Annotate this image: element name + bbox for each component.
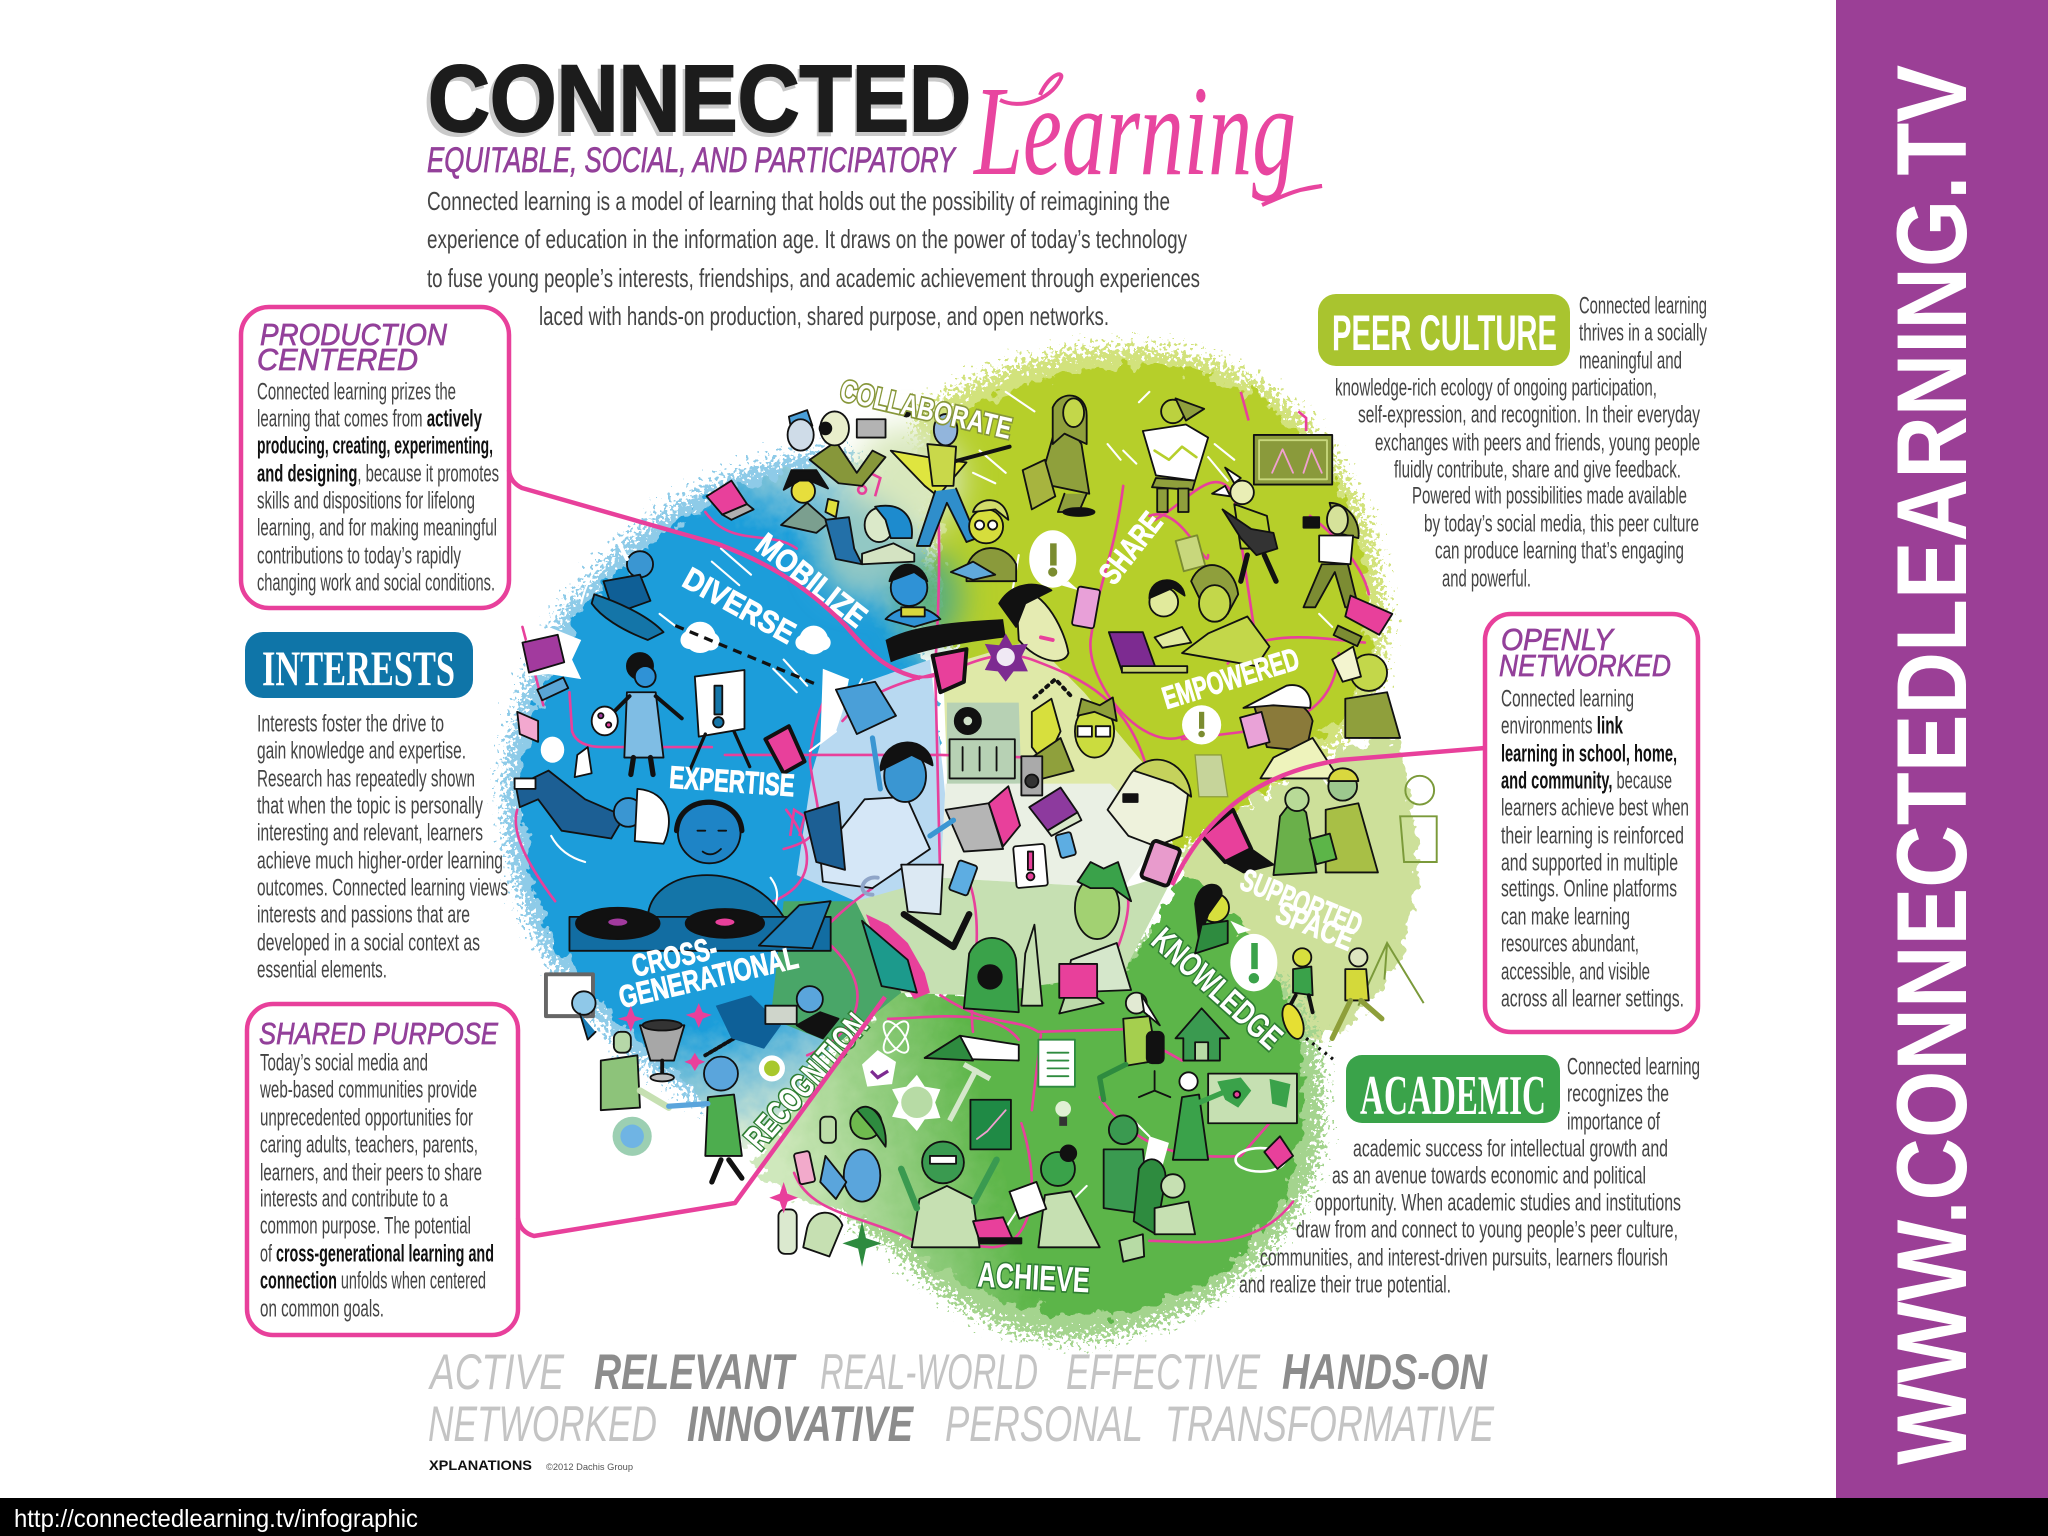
text block: production centered: skills and dispositions for lifelong	[257, 488, 475, 514]
figure: woman at laptop	[1182, 565, 1270, 666]
intro paragraph: experience of education in the information age. It draws on the power of today’s technology	[427, 224, 1187, 254]
text block: peer culture: and powerful.	[1442, 566, 1531, 592]
intro paragraph	[427, 186, 1200, 331]
blob: supported space pale green	[1175, 731, 1418, 1040]
keyword list: PERSONAL	[945, 1396, 1143, 1452]
title: Connected Learning: Learning	[973, 60, 1296, 202]
connector: openly networked to diagram	[1172, 748, 1485, 885]
heading: production centered: CENTERED	[257, 342, 418, 377]
credits: ©2012 Dachis Group	[546, 1462, 633, 1473]
text block: openly networked: across all learner settings.	[1501, 986, 1684, 1012]
figure: woman with shopping bag	[1023, 396, 1095, 516]
icon: atom	[879, 1018, 913, 1057]
figure: guy with glasses and green hair	[1075, 697, 1117, 758]
icon: blue open laptop with burst	[820, 669, 896, 744]
text block: openly networked: accessible, and visible	[1501, 958, 1650, 986]
badge: peer culture	[1318, 294, 1570, 366]
figure: woman with clipboard	[1009, 1145, 1100, 1247]
icon: blue scroll and tools	[825, 499, 862, 564]
text block: shared purpose: of cross-generational learning and	[260, 1240, 494, 1268]
text block: peer culture: fluidly contribute, share and give feedback.	[1394, 456, 1681, 484]
icon: green chalkboard	[970, 1100, 1011, 1149]
panel: shared purpose	[247, 997, 885, 1335]
text block: production centered: learning that comes from actively	[257, 406, 482, 432]
text block: openly networked: learning in school, home,	[1501, 740, 1677, 768]
icon: trophy	[640, 1020, 684, 1081]
text block: interests: that when the topic is personally	[257, 792, 483, 820]
icon: sun yellow green	[759, 1055, 785, 1081]
figure: man with cap and phone	[1240, 685, 1339, 778]
text block: openly networked: learners achieve best when	[1501, 794, 1689, 822]
blob: peer culture yellow-green	[914, 348, 1384, 849]
credits	[429, 1457, 633, 1473]
text block: openly networked: can make learning	[1501, 904, 1630, 930]
title: Connected Learning	[424, 46, 1322, 205]
title: Connected Learning: CONNECTED	[424, 50, 970, 156]
heading: openly networked: NETWORKED	[1499, 648, 1671, 683]
icon: white sun	[892, 1075, 940, 1131]
icon: exclamation bubble small	[1182, 705, 1221, 744]
figure: audience with laptop on table	[1104, 1115, 1195, 1234]
icon: purple laptop lower	[1029, 788, 1081, 836]
icon: pink laptop	[707, 481, 754, 520]
text block: production centered	[257, 378, 499, 596]
keyword list: HANDS-ON	[1282, 1344, 1488, 1400]
icon: pink tablet small	[1140, 840, 1181, 887]
badge: academic: ACADEMIC	[1360, 1065, 1546, 1127]
icon: blue phone	[1055, 832, 1076, 858]
icon: paper bag	[1195, 755, 1228, 797]
text block: production centered: changing work and social conditions.	[257, 570, 495, 596]
figure: girl with dark braids	[1195, 885, 1229, 953]
text block: interests: Interests foster the drive to	[257, 710, 444, 738]
subtitle: EQUITABLE, SOCIAL, AND PARTICIPATORY	[427, 141, 957, 180]
icon: teal monitor with burst	[862, 914, 930, 999]
label: SUPPORTED SPACE: SUPPORTED	[1236, 862, 1367, 943]
figure: man eating pizza	[1332, 647, 1400, 738]
figure: scientist with glasses	[901, 1142, 997, 1247]
text block: shared purpose: on common goals.	[260, 1296, 384, 1322]
figure: blue woman	[669, 1038, 742, 1182]
icon: exclamation bubble	[1029, 530, 1079, 590]
text block: shared purpose: web-based communities provide	[259, 1076, 477, 1104]
text block: production centered: learning, and for making meaningful	[257, 514, 497, 542]
figure: glasses person	[951, 500, 1016, 581]
text block: shared purpose	[259, 1050, 494, 1322]
panel: interests	[245, 632, 508, 984]
icon: small table with laptop	[1236, 1136, 1293, 1172]
figure: woman with turban and girl	[1273, 768, 1378, 875]
figure: dreadlock kid	[781, 470, 829, 533]
icon: pink desktop monitor	[1059, 964, 1104, 1014]
figure: green-haired headphone kid	[964, 925, 1042, 1012]
heading: production centered	[257, 317, 448, 377]
text block: openly networked: and supported in multiple	[1501, 850, 1678, 876]
black brush stroke	[886, 619, 1006, 662]
figure: large bald head	[1108, 760, 1191, 846]
text block: openly networked: their learning is reinforced	[1501, 822, 1684, 850]
footer: black source bar: http://connectedlearning.tv/infographic	[14, 1505, 418, 1533]
text block: peer culture	[1335, 292, 1707, 592]
figure: running old man	[1332, 948, 1382, 1038]
badge: academic	[1346, 1055, 1560, 1127]
figure: blue hair person	[862, 506, 914, 564]
text block: production centered: contributions to today’s rapidly	[257, 542, 461, 570]
icon: hammer	[950, 1064, 990, 1121]
icon: pale laptop corner	[1119, 1234, 1144, 1262]
icon: pink laptop with black base	[1202, 810, 1273, 872]
figure: center face with black hair	[999, 585, 1068, 661]
icon: exclamation tablet	[1013, 844, 1048, 888]
title: Connected Learning: CONNECTED	[428, 46, 971, 152]
icon: notebook	[1176, 535, 1205, 571]
panel: production centered	[241, 307, 920, 678]
text block: shared purpose: caring adults, teachers, parents,	[260, 1132, 478, 1158]
text block: academic: opportunity. When academic studies and institutions	[1315, 1190, 1681, 1216]
label: CROSS-GENERATIONAL: GENERATIONAL	[615, 940, 801, 1015]
icon: pink star	[769, 1182, 798, 1213]
figure: boy crossing arms	[886, 565, 940, 627]
icon: green star	[842, 1221, 882, 1267]
text block: shared purpose: connection unfolds when centered	[260, 1268, 486, 1294]
figure: mohawk guy	[1064, 862, 1131, 993]
text block: interests: essential elements.	[257, 956, 387, 984]
text block: interests: Research has repeatedly shown	[257, 766, 475, 792]
icon: exclamation bubble green	[1230, 921, 1277, 991]
keyword list: INNOVATIVE	[687, 1396, 914, 1452]
text block: production centered: producing, creating, experimenting,	[257, 432, 493, 460]
text block: openly networked: Connected learning	[1501, 686, 1634, 712]
text block: academic: importance of	[1567, 1108, 1660, 1136]
heading: production centered: PRODUCTION	[260, 317, 448, 352]
keyword list: NETWORKED	[428, 1396, 657, 1452]
text block: interests: outcomes. Connected learning views	[257, 874, 508, 902]
figure: black-haired boy	[1149, 580, 1191, 648]
text block: interests: achieve much higher-order learning	[257, 848, 503, 874]
dashed line across blue	[675, 626, 816, 684]
icon: pink sparkles	[618, 1003, 712, 1071]
text block: openly networked: environments link	[1501, 712, 1623, 740]
icon: purple monitor with burst	[522, 627, 581, 700]
intro paragraph: laced with hands-on production, shared purpose, and open networks.	[539, 301, 1109, 331]
figure: man with cap and headphones	[788, 410, 814, 451]
label: EXPERTISE: EXPERTISE	[668, 760, 796, 803]
center overlap: pale blue, yellow and green tints	[771, 640, 1175, 1045]
text block: openly networked: settings. Online platforms	[1501, 876, 1677, 902]
icon: world map on screen	[1208, 1074, 1297, 1123]
figure: floating kid	[515, 747, 669, 844]
label: ACHIEVE: ACHIEVE	[977, 1256, 1091, 1300]
icon: pink tablet	[933, 649, 967, 692]
label: SUPPORTED SPACE: SPACE	[1271, 895, 1359, 958]
badge: interests	[245, 632, 473, 698]
icon: sun blue	[613, 1117, 652, 1156]
text block: academic	[1239, 1054, 1700, 1298]
figure: long-hair guy in white shirt	[1303, 503, 1359, 607]
figure: rabbit-ear guitarist	[1212, 468, 1277, 581]
figure: thumbs-up person	[820, 1107, 886, 1147]
text block: peer culture: Connected learning	[1579, 292, 1707, 320]
dotted trail	[1306, 1038, 1335, 1061]
heading: openly networked: OPENLY	[1501, 622, 1615, 657]
blending between blue and yellow fields	[818, 426, 963, 645]
keyword list: RELEVANT	[594, 1344, 797, 1400]
icon: pink laptop lower	[973, 1217, 1021, 1243]
decorative white motion strokes and sparkles	[551, 392, 1332, 1228]
figure: guitarist	[891, 414, 1010, 546]
blob: academic green	[751, 872, 1322, 1339]
text block: shared purpose: learners, and their peers to share	[260, 1160, 482, 1186]
icon: school house	[1175, 1008, 1229, 1061]
sidebar: purple band with URL	[1836, 0, 2048, 1498]
icon: purple laptop	[1109, 632, 1187, 673]
text block: interests: gain knowledge and expertise.	[257, 738, 466, 764]
music notes	[677, 392, 1306, 938]
pink network lines	[516, 455, 1369, 1247]
credits: XPLANATIONS	[429, 1457, 532, 1473]
intro paragraph: to fuse young people’s interests, friendships, and academic achievement through experiences	[427, 263, 1200, 293]
figure: girl with camcorder	[716, 986, 839, 1049]
text block: openly networked: resources abundant,	[1501, 930, 1639, 958]
text block: peer culture: can produce learning that’s engaging	[1435, 538, 1684, 564]
text block: interests: interesting and relevant, learners	[257, 820, 483, 846]
badge: peer culture: PEER CULTURE	[1332, 305, 1557, 361]
heading: openly networked	[1499, 622, 1671, 683]
footer: black source bar	[0, 1498, 2048, 1536]
figure: DJ	[648, 801, 784, 917]
text block: shared purpose: interests and contribute to a	[260, 1186, 448, 1212]
figure: man with handshake	[601, 1032, 669, 1110]
figure: girl with pale hair and tablet	[862, 860, 978, 947]
text block: openly networked	[1501, 686, 1689, 1012]
heading: shared purpose: SHARED PURPOSE	[259, 1016, 498, 1051]
icon: board with triangles	[1254, 435, 1332, 485]
figure: skateboarder	[592, 533, 663, 640]
text block: interests: developed in a social context as	[257, 930, 480, 956]
label: COLLABORATE: COLLABORATE	[837, 374, 1015, 446]
icon: white pentagon badge	[862, 1050, 896, 1087]
text block: academic: Connected learning	[1567, 1054, 1700, 1080]
text block: production centered: and designing, because it promotes	[257, 460, 499, 488]
icon: grey and pink laptop	[946, 786, 1020, 852]
figure: girl with dotted hair	[1032, 679, 1074, 780]
icon: white dot	[541, 737, 564, 763]
text block: academic: communities, and interest-driven pursuits, learners flourish	[1260, 1244, 1668, 1272]
label: MOBILIZE: MOBILIZE	[749, 526, 874, 634]
icon: fists and head	[778, 1209, 842, 1256]
text block: peer culture: Powered with possibilities made available	[1412, 482, 1687, 510]
icon: phone	[1072, 586, 1100, 629]
icon: turntable and mixer	[950, 708, 1042, 795]
icon: black tablet	[765, 726, 805, 773]
keyword list: EFFECTIVE	[1066, 1344, 1260, 1400]
text block: academic: recognizes the	[1567, 1080, 1669, 1108]
label: SUPPORTED SPACE	[1236, 862, 1367, 958]
text block: peer culture: thrives in a socially	[1579, 320, 1707, 346]
icon: DJ decks with records	[569, 901, 831, 951]
text block: shared purpose: Today’s social media and	[260, 1050, 428, 1076]
keyword list: TRANSFORMATIVE	[1165, 1396, 1494, 1452]
text block: peer culture: by today’s social media, this peer culture	[1424, 510, 1699, 538]
icon: white clouds	[680, 622, 831, 654]
text block: peer culture: knowledge-rich ecology of ongoing participation,	[1335, 374, 1657, 402]
icon: pink monitor	[1334, 596, 1392, 646]
text block: peer culture: exchanges with peers and friends, young people	[1375, 430, 1700, 456]
panel: openly networked	[1172, 614, 1698, 1032]
text block: academic: draw from and connect to young people’s peer culture,	[1296, 1216, 1678, 1244]
text block: openly networked: and community, because	[1501, 768, 1672, 794]
figure: applauding blue person	[794, 1149, 880, 1202]
icon: award monitor and ribbon	[546, 974, 596, 1040]
icon: lightbulb	[1055, 1101, 1071, 1126]
text block: peer culture: meaningful and	[1579, 348, 1682, 374]
panel: peer culture	[1318, 292, 1707, 592]
text block: shared purpose: unprecedented opportunities for	[260, 1104, 473, 1132]
label: SHARE: SHARE	[1092, 505, 1169, 591]
figure: teacher	[1173, 1072, 1228, 1160]
icon: swing and playground	[1358, 776, 1437, 1006]
badge: interests: INTERESTS	[262, 640, 455, 696]
text block: interests: interests and passions that are	[257, 902, 470, 928]
connector: shared purpose to diagram	[518, 997, 885, 1236]
text block: academic: as an avenue towards economic and political	[1332, 1162, 1646, 1190]
figure: woman holding patterned shirt	[1143, 398, 1208, 512]
icon: purple lightbulb burst	[985, 633, 1028, 682]
keyword list: REAL-WORLD	[820, 1344, 1038, 1400]
figure: cameraman	[810, 409, 910, 486]
figure: skateboard kid	[1278, 948, 1313, 1042]
panel: academic	[1239, 1054, 1700, 1298]
label: DIVERSE: DIVERSE	[677, 561, 801, 651]
text block: interests	[257, 710, 508, 984]
label: EMPOWERED: EMPOWERED	[1158, 641, 1303, 716]
connector: production centered to diagram	[509, 470, 920, 678]
label: CROSS-GENERATIONAL: CROSS-	[628, 930, 720, 984]
figure: center reader	[805, 738, 953, 888]
intro paragraph: Connected learning is a model of learning that holds out the possibility of reimagining the	[427, 186, 1170, 216]
label: KNOWLEDGE: KNOWLEDGE	[1144, 921, 1290, 1057]
icon: CV scroll	[1038, 1040, 1075, 1087]
label: RECOGNITION: RECOGNITION	[738, 1006, 876, 1157]
keyword list: ACTIVE	[428, 1344, 564, 1400]
text block: peer culture: self-expression, and recognition. In their everyday	[1358, 402, 1700, 428]
keyword list	[428, 1344, 1494, 1452]
figure: painter	[592, 653, 682, 775]
blob: interests blue	[505, 451, 940, 1149]
icon: greenhouse	[925, 1036, 1019, 1061]
text block: academic: academic success for intellectual growth and	[1353, 1136, 1668, 1162]
icon: pale laptop	[517, 712, 538, 742]
text block: shared purpose: common purpose. The potential	[260, 1212, 471, 1240]
illustration: overlapping spheres of connected learning	[505, 348, 1437, 1339]
text block: academic: and realize their true potential.	[1239, 1272, 1451, 1298]
figure: girl on office chair	[1100, 993, 1170, 1100]
icon: easel with exclamation	[690, 670, 750, 771]
text block: production centered: Connected learning prizes the	[257, 378, 456, 406]
